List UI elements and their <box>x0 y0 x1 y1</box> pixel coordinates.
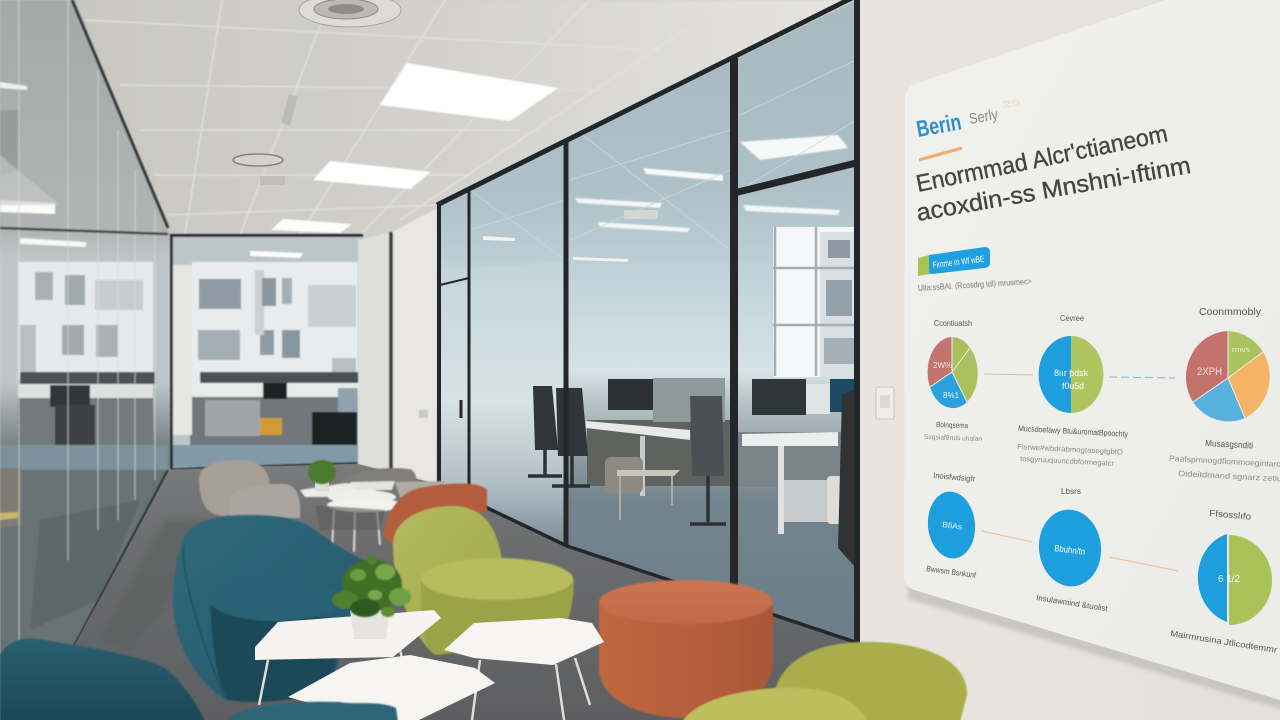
orange chair <box>383 484 487 548</box>
pie chart: top right: rmvs <box>1232 347 1251 354</box>
pie chart: top left: Ccontiuatsh <box>934 319 972 328</box>
captions: first row: Mucsdoefawy Btu&uromatBpoochty <box>1018 424 1128 439</box>
pie chart: bottom right <box>1170 508 1278 655</box>
captions: first row: Oideitdmand sgnarz zetlu <box>1178 469 1280 483</box>
teal armchair <box>173 515 367 702</box>
captions: first row: tosgyruuquuncdbformegatcr <box>1020 454 1115 468</box>
circle: bottom left <box>925 471 978 580</box>
carpet floor <box>50 464 860 720</box>
black partition frame <box>437 0 858 643</box>
small round tables at back <box>300 481 403 552</box>
poster title: acoxdin-ss Mnshni-ıftinm <box>914 152 1193 227</box>
olive armchair <box>393 506 574 655</box>
poster title: Enormmad Alcr'ctianeom <box>914 120 1170 198</box>
pie chart: top right <box>1186 307 1270 421</box>
ceiling <box>0 0 870 250</box>
circle: bottom centre: Insulawmind &tuolist <box>1036 593 1109 613</box>
pie chart: top left: 2W% <box>933 361 952 370</box>
pie chart: top centre <box>1039 314 1103 413</box>
circle: bottom left: BfiAs <box>942 520 963 532</box>
pie chart: bottom right: Mairmrusina Jtlicodtemmr <box>1170 628 1278 655</box>
poster tag <box>918 247 990 276</box>
small potted plant <box>308 460 336 491</box>
orange pouf <box>599 580 773 718</box>
captions: first row: Bolnqsema <box>936 420 969 430</box>
back room seen through glass <box>168 234 363 469</box>
poster brand header: Berin <box>914 109 963 142</box>
white wall section <box>358 208 438 484</box>
captions: first row: Paafspmnogdfiommoegintaro <box>1169 454 1280 469</box>
infographic poster <box>904 0 1280 712</box>
circle: bottom centre <box>1035 487 1109 613</box>
captions: first row: Ssqsiaf8rols uhalan <box>924 434 982 443</box>
yellow-green armchair, lower right <box>682 642 967 720</box>
pie chart: top left: 8%1 <box>943 391 960 400</box>
poster brand header: Serly <box>968 106 1000 128</box>
wall light switch <box>876 387 894 419</box>
poster title <box>914 120 1193 227</box>
circle: bottom centre: Lbsrs <box>1061 487 1081 496</box>
pie chart: top centre: f0u5d <box>1062 381 1084 391</box>
pie chart: top centre: 8ıır þdsk <box>1054 368 1088 378</box>
circle: bottom left: Inoisfwdsigfr <box>933 471 976 484</box>
left glass wall with reflections <box>0 0 170 720</box>
captions: first row: Musasgsnditi <box>1205 438 1253 451</box>
glazed office behind the glass partition <box>437 0 856 642</box>
circle: bottom centre: Bbuhn/tn <box>1054 543 1086 557</box>
poster tag: Fimme m Wf wBE <box>932 254 985 270</box>
wall <box>860 0 1280 720</box>
beige armchairs at back of lounge <box>199 460 445 519</box>
circle: bottom left: Bwwsm Bsnkunf <box>926 564 977 580</box>
poster subheading: Ulta:ssBAl. (Rcosdrg tdl) mrusmec> <box>918 277 1032 293</box>
poster brand header: 25 <box>1002 97 1021 110</box>
pie chart: top centre: Cevree <box>1060 314 1085 323</box>
pie chart: top left <box>928 319 978 408</box>
poster brand header <box>914 97 1021 142</box>
teal armchair, lower left <box>0 639 398 720</box>
pie chart: bottom right: Ffsosslıfo <box>1209 508 1252 522</box>
potted plant on table <box>332 555 411 639</box>
ceiling lights and vents <box>233 0 558 233</box>
captions: first row: Fisrwe#wbdrabmogtasegtgbtO <box>1017 442 1123 457</box>
poster accent line <box>919 148 962 160</box>
pie chart: top right: 2XPH <box>1197 366 1222 378</box>
connector lines <box>982 374 1178 571</box>
white hexagonal tables <box>255 610 604 720</box>
captions: first row <box>924 420 1280 483</box>
pie chart: bottom right: 6 1/2 <box>1218 574 1240 585</box>
pie chart: top right: Coonmmobly <box>1199 307 1261 318</box>
